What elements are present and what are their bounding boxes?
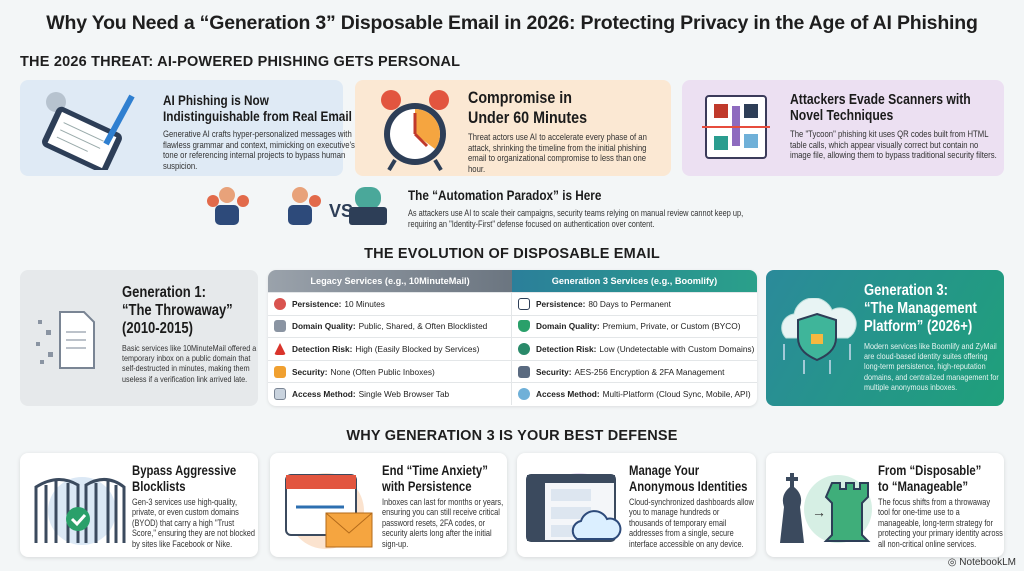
icon: dissolving document [36,311,95,369]
comparison table: Multi-Platform (Cloud Sync, Mobile, API) [603,389,751,399]
icon: people vs robot: VS [329,201,353,221]
comparison table: High (Easily Blocked by Services) [355,344,479,354]
text: automation paradox [408,187,743,229]
section heading: threat: THE 2026 THREAT: AI-POWERED PHISHING GETS PERSONAL [20,54,460,70]
panel: bypass blocklists: Blocklists [132,478,186,494]
comparison table: Access Method: [292,389,356,399]
panel: time anxiety: End “Time Anxiety” [382,463,488,478]
comparison table: Domain Quality: [536,321,600,331]
icon: alarm clock [381,90,449,171]
panel: generation 1: Basic services like 10MinuteMail offered a temporary inbox on a public domain that self-destructed in minutes, making them useless if a verification link arrived late. [122,343,256,384]
comparison table: None (Often Public Inboxes) [331,367,435,377]
panel: generation 1: Generation 1: [122,284,206,301]
text: automation paradox: The “Automation Paradox” is Here [408,187,601,203]
panel: generation 3: Generation 3: [864,282,948,299]
icon: dashboard and cloud [526,473,622,542]
title: Why You Need a “Generation 3” Disposable Email in 2026: Protecting Privacy in the Age of AI Phishing [46,12,978,34]
comparison table: Persistence: [536,299,585,309]
panel: disposable to manageable: The focus shifts from a throwaway tool for one-time use to a manageable, long-term strategy for protecting your primary identity across all non-critical online services. [878,497,1003,549]
icon: tablet and pen [42,92,135,170]
panel: evade scanners: The "Tycoon" phishing kit uses QR codes built from HTML table calls, which appear visually correct but contain no image file, allowing them to bypass traditional security filters. [790,129,997,160]
comparison table: Detection Risk: [536,344,596,354]
panel: bypass blocklists [20,453,258,557]
comparison table: AES-256 Encryption & 2FA Management [575,367,724,377]
panel: generation 1 [20,270,258,406]
comparison table: Access Method: [536,389,600,399]
comparison table: Security: [536,367,572,377]
icon: cloud shield [781,298,857,374]
section heading: evolution: THE EVOLUTION OF DISPOSABLE EMAIL [364,246,660,262]
panel: time anxiety: with Persistence [382,478,471,494]
panel: AI phishing: Generative AI crafts hyper-personalized messages with flawless grammar and context, mimicking on executive's tone or referencing internal projects to bypass human suspicion. [163,129,355,171]
panel: manage identities: Anonymous Identities [629,478,747,494]
footer: NotebookLM: ◎ NotebookLM [948,557,1016,568]
panel: AI phishing: Indistinguishable from Real Email [163,108,352,124]
panel: compromise [355,80,671,176]
panel: time anxiety: Inboxes can last for months or years, ensuring you can still receive critical password resets, 2FA codes, or security alerts long after the initial sign-up. [382,497,503,549]
comparison table: Persistence: [292,299,341,309]
icon: chess king to rook [780,473,872,543]
icon: chess king to rook: → [812,504,826,520]
section heading: defense: WHY GENERATION 3 IS YOUR BEST DEFENSE [346,428,678,444]
panel: manage identities: Manage Your [629,463,699,478]
panel: compromise: Compromise in [468,88,572,107]
panel: time anxiety [270,453,507,557]
icon: people vs robot [207,187,387,225]
comparison table [268,270,757,406]
icon: QR code [702,95,770,159]
comparison table: 10 Minutes [344,299,385,309]
comparison table: Domain Quality: [292,321,356,331]
comparison table: 80 Days to Permanent [588,299,671,309]
comparison table: Generation 3 Services (e.g., Boomlify) [552,276,717,286]
comparison table: Public, Shared, & Often Blocklisted [359,321,487,331]
panel: generation 3: “The Management Platform” (2026+) [864,300,977,335]
comparison table: Security: [292,367,328,377]
icon: gate with check [34,477,126,545]
panel: AI phishing [20,80,343,176]
panel: evade scanners: Attackers Evade Scanners with Novel Techniques [790,92,971,124]
panel: compromise: Threat actors use AI to accelerate every phase of an attack, shrinking the timeline from the initial phishing email to organizational compromise to less than one hour. [468,132,647,174]
comparison table: Legacy Services (e.g., 10MinuteMail) [310,276,470,286]
panel: generation 3: Modern services like Boomlify and ZyMail are cloud-based identity suites offering long-term persistence, high-reputation domains, and centralized management for multiple anonymous inboxes. [864,341,999,392]
panel: bypass blocklists: Gen-3 services use high-quality, private, or even custom domains (BYOD) that carry a high "Trust Score," ensuring they are not blocked by sites like Facebook or Nike. [132,497,255,549]
comparison table: Premium, Private, or Custom (BYCO) [603,321,740,331]
comparison table: Detection Risk: [292,344,352,354]
panel: disposable to manageable: to “Manageable” [878,478,968,494]
panel: disposable to manageable: From “Disposable” [878,463,981,478]
panel: disposable to manageable [766,453,1004,557]
panel: generation 3 [766,270,1004,406]
comparison table: Single Web Browser Tab [359,389,449,399]
panel: generation 1: “The Throwaway” [122,302,233,319]
panel: evade scanners [682,80,1004,176]
panel: compromise: Under 60 Minutes [468,108,587,126]
panel: manage identities [517,453,756,557]
panel: generation 1: (2010-2015) [122,320,193,337]
comparison table: Low (Undetectable with Custom Domains) [599,344,754,354]
icon: calendar and envelope [285,473,372,549]
panel: bypass blocklists: Bypass Aggressive [132,463,236,478]
panel: manage identities: Cloud-synchronized dashboards allow you to manage hundreds or thousands of temporary email addresses from a single, secure interface accessible on any device. [629,497,754,549]
text: automation paradox: As attackers use AI to scale their campaigns, security teams relying on manual review cannot keep up, requiring an "Identity-First" defense focused on authentication over content. [408,208,743,229]
panel: AI phishing: AI Phishing is Now [163,92,269,108]
